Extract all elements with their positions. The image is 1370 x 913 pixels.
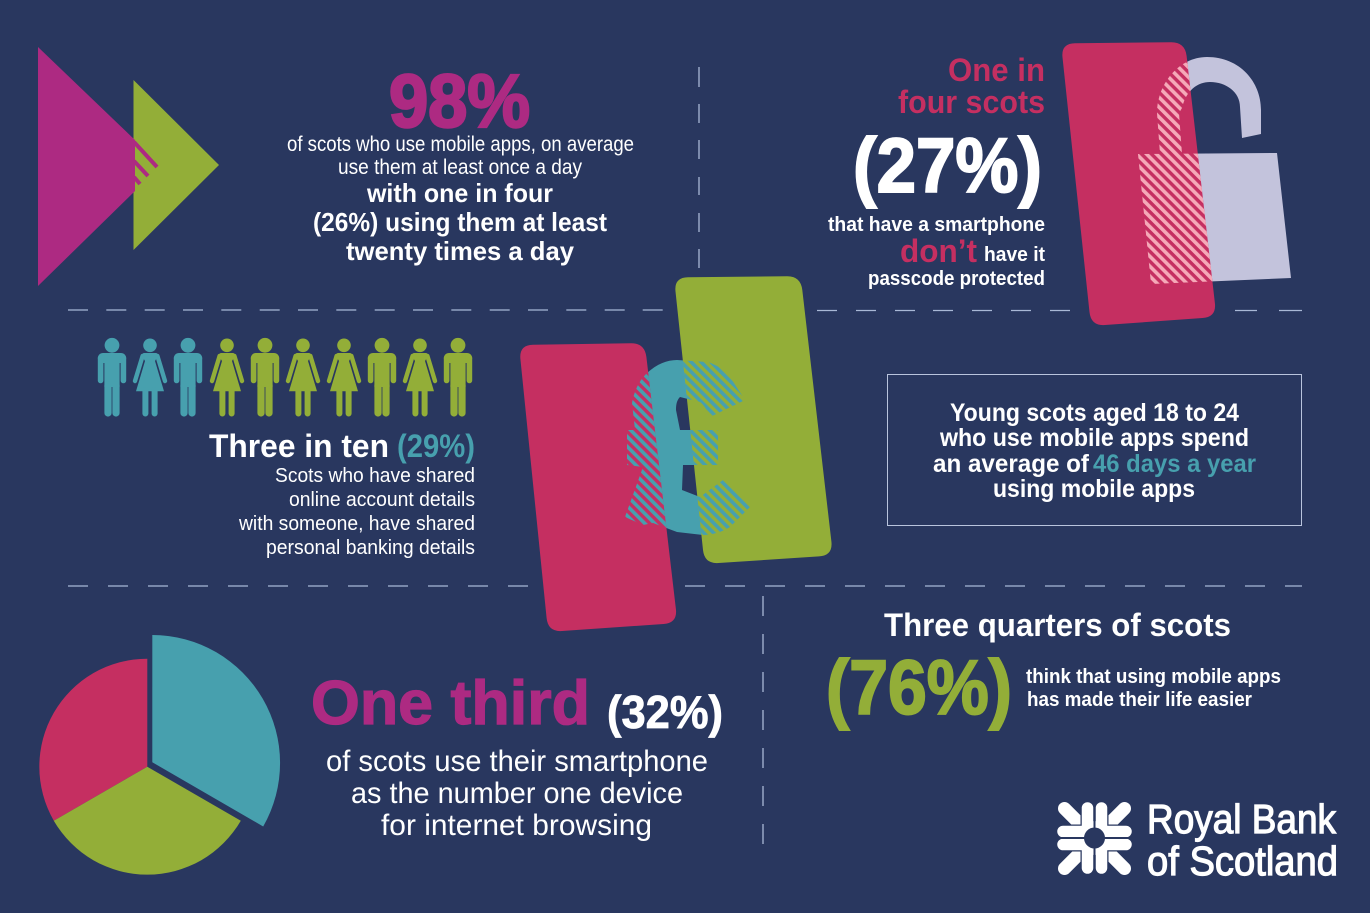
- text: daily use description: of scots who use mobile apps, on average: [287, 133, 634, 156]
- text: daily use description: with one in four: [366, 178, 553, 208]
- text: easier life description: [1026, 666, 1281, 711]
- text: shared details description: Scots who have shared: [275, 465, 475, 487]
- text: browsing description: [326, 745, 708, 842]
- text: daily use description: twenty times a day: [346, 236, 575, 266]
- heading: one in four scots: [898, 52, 1045, 120]
- text: daily use description: use them at least once a day: [338, 156, 582, 179]
- logo wordmark: of Scotland: [1147, 838, 1338, 884]
- heading: three in ten: Three in ten: [209, 428, 389, 464]
- text: smartphone passcode description: have it: [984, 244, 1045, 266]
- panel: 46 days a year box: an average of: [933, 450, 1090, 478]
- panel: passcode protection: [828, 42, 1291, 325]
- panel: 46 days a year box: Young scots aged 18 to 24: [950, 399, 1239, 427]
- heading: one in four scots: four scots: [898, 84, 1045, 120]
- panel: 46 days a year box: who use mobile apps spend: [939, 424, 1249, 452]
- stat: 27%: (27%): [853, 123, 1042, 209]
- text: browsing description: of scots use their smartphone: [326, 745, 708, 778]
- heading: three quarters of scots: Three quarters of scots: [884, 607, 1231, 643]
- chart: pie: [39, 635, 280, 875]
- logo wordmark: [1147, 796, 1338, 884]
- text: smartphone passcode description: that have a smartphone: [828, 214, 1045, 236]
- text: shared details description: online account details: [289, 489, 475, 511]
- stat: 32%: (32%): [607, 686, 723, 738]
- icon: phone and open padlock: [1062, 42, 1291, 325]
- panel: one third browsing: [39, 635, 723, 875]
- logo: Royal Bank of Scotland: [1056, 796, 1338, 884]
- panel: 46 days a year box: 46 days a year: [1093, 450, 1256, 478]
- text: browsing description: as the number one device: [351, 777, 683, 810]
- icon: fast-forward triangles: [38, 47, 219, 286]
- text: shared details description: personal banking details: [266, 537, 475, 559]
- text: smartphone passcode description: don’t: [900, 233, 977, 269]
- panel: three quarters easier life: [826, 607, 1281, 731]
- text: easier life description: think that using mobile apps: [1026, 666, 1281, 688]
- text: easier life description: has made their life easier: [1027, 689, 1252, 711]
- heading: one in four scots: One in: [948, 52, 1045, 88]
- icon: daisy wheel symbol: [1056, 800, 1133, 876]
- stat: 76%: (76%): [826, 645, 1012, 731]
- text: shared details description: with someone, have shared: [238, 513, 475, 535]
- panel: 46 days a year box: [888, 374, 1302, 526]
- icon: two phones and pound sign: [520, 276, 832, 631]
- heading: three in ten: [209, 428, 475, 464]
- panel: 98% daily use: [38, 47, 634, 286]
- logo wordmark: Royal Bank: [1147, 796, 1336, 842]
- panel: 46 days a year box: using mobile apps: [993, 475, 1195, 503]
- stat: one third: One third: [311, 669, 590, 738]
- heading: three in ten: (29%): [397, 428, 475, 464]
- text: daily use description: [287, 133, 634, 266]
- text: smartphone passcode description: passcode protected: [868, 268, 1045, 290]
- text: smartphone passcode description: [828, 214, 1045, 290]
- panel: sharing banking details: [98, 276, 832, 631]
- text: daily use description: (26%) using them at least: [313, 207, 607, 237]
- text: shared details description: [238, 465, 475, 559]
- text: browsing description: for internet browsing: [381, 809, 652, 842]
- icon row: ten people: [98, 338, 472, 414]
- stat: 98%: 98%: [389, 59, 530, 143]
